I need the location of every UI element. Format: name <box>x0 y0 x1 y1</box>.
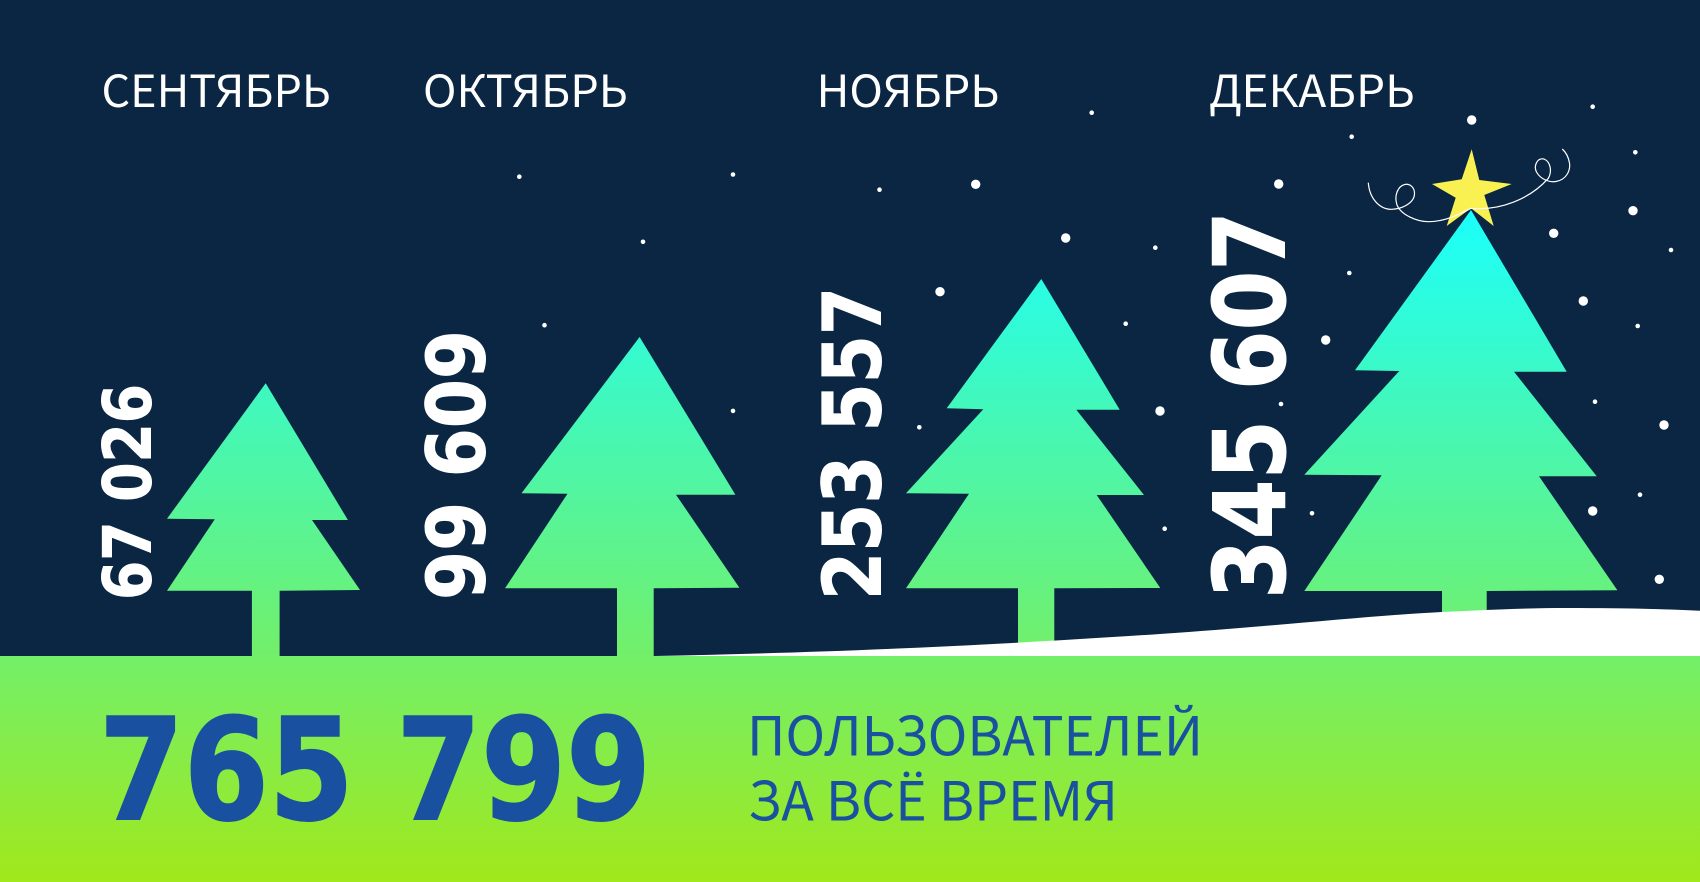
label: October: ОКТЯБРЬ <box>423 56 628 120</box>
tree: October <box>505 337 739 656</box>
ground <box>0 656 1700 882</box>
swirl ribbons <box>1368 149 1570 222</box>
label: September: СЕНТЯБРЬ <box>102 56 331 120</box>
star with swirls <box>1368 149 1570 226</box>
tree: September <box>167 383 360 656</box>
icon: star <box>1432 149 1512 226</box>
value: November: 253 557 <box>806 287 900 600</box>
month labels <box>102 56 1415 120</box>
value: September: 67 026 <box>90 384 166 600</box>
caption line 2: ЗА ВСЁ ВРЕМЯ <box>748 758 1118 837</box>
total users caption <box>747 693 1203 837</box>
value: December: 345 607 <box>1194 211 1308 599</box>
monthly values <box>90 211 1308 600</box>
label: November: НОЯБРЬ <box>816 56 1000 120</box>
value: October: 99 609 <box>410 330 504 600</box>
label: December: ДЕКАБРЬ <box>1209 56 1415 120</box>
caption line 1: ПОЛЬЗОВАТЕЛЕЙ <box>747 693 1203 772</box>
total users number: 765 799 <box>99 689 651 853</box>
tree: November <box>906 279 1160 656</box>
snow drift <box>654 608 1700 656</box>
snowflakes <box>517 104 1673 584</box>
tree: December <box>1304 210 1617 656</box>
